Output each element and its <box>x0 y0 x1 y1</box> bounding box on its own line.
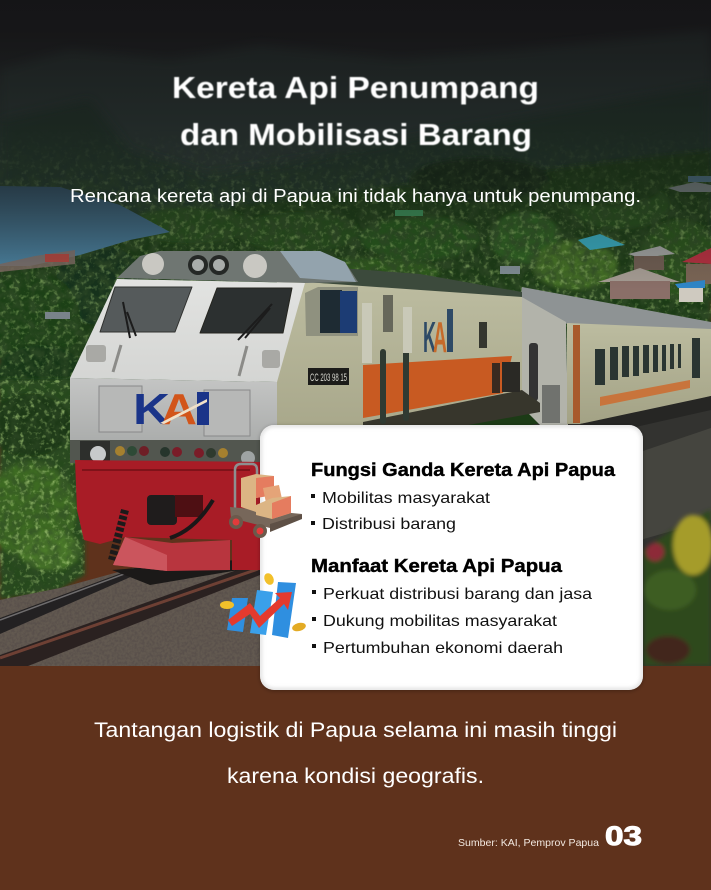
source: Sumber: KAI, Pemprov Papua <box>458 837 599 849</box>
info card <box>260 425 643 690</box>
windshields <box>100 287 192 332</box>
hillside forest <box>0 150 711 440</box>
foreground foliage left <box>0 380 85 600</box>
footer text: Tantangan logistik di Papua selama ini masih tinggi <box>94 719 617 742</box>
cab front white <box>70 279 305 382</box>
red buffer <box>75 460 262 570</box>
section: Fungsi Ganda: Distribusi barang <box>322 516 456 533</box>
section: Fungsi Ganda <box>311 459 616 533</box>
section: Manfaat: Pertumbuhan ekonomi daerah <box>323 640 563 657</box>
top dark gradient <box>0 0 711 290</box>
page number: 03 <box>605 821 642 851</box>
cab side windows <box>305 287 358 336</box>
right foreground plants <box>643 510 711 666</box>
locomotive: CC 203 98 15 <box>310 372 347 384</box>
title: dan Mobilisasi Barang <box>180 117 532 152</box>
passenger carriage <box>520 287 711 435</box>
icon: cargo trolley <box>229 464 302 538</box>
section: Manfaat: Dukung mobilitas masyarakat <box>323 613 558 630</box>
cab details <box>86 345 106 362</box>
photo: train in Papua landscape <box>0 0 711 666</box>
right ground and tracks <box>240 395 711 666</box>
hillside texture <box>0 150 711 382</box>
front KAI logo: A <box>161 385 197 434</box>
locomotive side body <box>277 282 522 470</box>
lights band <box>70 440 262 463</box>
background sky and mountains <box>0 0 711 300</box>
section: Fungsi Ganda: Fungsi Ganda Kereta Api Papua <box>311 459 616 480</box>
underframe <box>363 390 540 432</box>
subtitle: Rencana kereta api di Papua ini tidak hanya untuk penumpang. <box>70 185 641 206</box>
front KAI logo: K <box>133 385 170 434</box>
side KAI logo: K <box>423 313 436 362</box>
locomotive <box>70 251 540 571</box>
section: Fungsi Ganda: Mobilitas masyarakat <box>322 490 491 507</box>
hillside houses <box>0 176 711 319</box>
plow <box>113 537 230 571</box>
footer text: karena kondisi geografis. <box>227 765 484 788</box>
icon: growth chart with coins <box>220 572 307 638</box>
section: Manfaat <box>311 555 592 657</box>
orange side stripe <box>363 356 512 418</box>
side KAI logo: A <box>433 313 447 362</box>
silver band <box>70 378 277 444</box>
footer text <box>94 719 617 788</box>
section: Manfaat: Manfaat Kereta Api Papua <box>311 555 563 576</box>
brown footer panel <box>0 666 711 890</box>
front KAI logo <box>133 385 209 434</box>
cab roof <box>117 251 358 283</box>
number plate <box>308 368 349 385</box>
louvers <box>362 295 412 363</box>
lake <box>0 186 170 266</box>
ballast and rails <box>0 558 262 666</box>
title <box>172 70 539 152</box>
section: Manfaat: Perkuat distribusi barang dan jasa <box>323 586 592 603</box>
title: Kereta Api Penumpang <box>172 70 539 105</box>
